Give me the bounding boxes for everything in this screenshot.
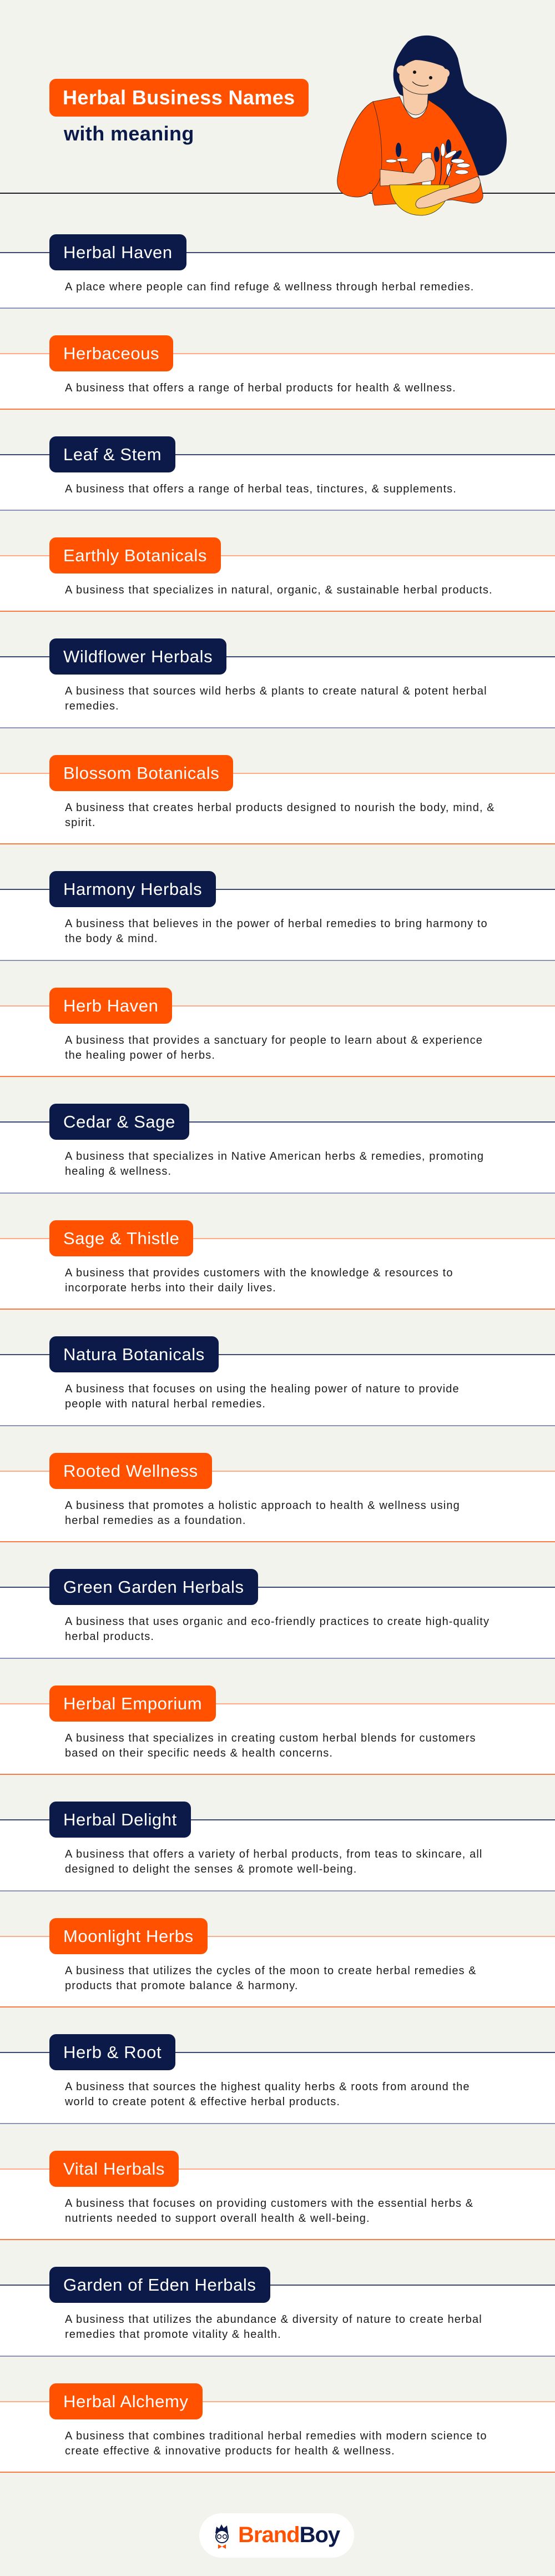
entry: Sage & Thistle: incorporate herbs into their daily lives. [65,1281,276,1294]
entry: Herb Haven: A business that provides a sanctuary for people to learn about & experience [65,1034,483,1046]
entry: Earthly Botanicals [0,555,555,612]
entry: Garden of Eden Herbals: remedies that promote vitality & health. [65,2328,281,2341]
entry: Herbal Haven: A place where people can find refuge & wellness through herbal remedies. [65,281,474,293]
icon: boy [215,2524,229,2549]
entry: Herbal Alchemy: create effective & innovative products for health & wellness. [65,2445,395,2457]
entry: Cedar & Sage: healing & wellness. [65,1165,171,1178]
entry: Vital Herbals [0,2169,555,2240]
entry: Wildflower Herbals: Wildflower Herbals [63,647,213,666]
entry: Blossom Botanicals: A business that creates herbal products designed to nourish the body, mind, & [65,802,495,814]
entry: Leaf & Stem: A business that offers a range of herbal teas, tinctures, & supplements. [65,483,457,495]
subtitle: with meaning [64,122,194,145]
entry: Green Garden Herbals: A business that uses organic and eco-friendly practices to create high-quality [65,1616,490,1628]
entry: Natura Botanicals: Natura Botanicals [63,1345,205,1364]
logo text: BrandBoy [238,2523,340,2547]
entry: Harmony Herbals: the body & mind. [65,933,158,945]
entry: Blossom Botanicals: Blossom Botanicals [63,763,219,783]
entry: Wildflower Herbals [0,656,555,728]
footer logo: BrandBoy [199,2513,354,2558]
entry: Sage & Thistle: A business that provides customers with the knowledge & resources to [65,1267,453,1279]
entry: Vital Herbals: A business that focuses on providing customers with the essential herbs & [65,2197,473,2210]
entry: Harmony Herbals: Harmony Herbals [63,879,202,899]
entry: Herb & Root [0,2052,555,2124]
entry: Cedar & Sage: Cedar & Sage [63,1112,175,1131]
entry: Sage & Thistle [0,1238,555,1310]
entry: Herbaceous [0,353,555,410]
entry: Earthly Botanicals: A business that specializes in natural, organic, & sustainable herbal products. [65,584,493,596]
entry: Blossom Botanicals [0,773,555,844]
entry: Rooted Wellness: herbal remedies as a foundation. [65,1515,246,1527]
entry: Moonlight Herbs: products that promote balance & harmony. [65,1980,299,1992]
entry: Natura Botanicals: A business that focuses on using the healing power of nature to provide [65,1383,460,1395]
entry: Harmony Herbals [0,889,555,960]
entry: Herbal Emporium: based on their specific needs & health concerns. [65,1747,333,1759]
entry: Herbal Delight: A business that offers a variety of herbal products, from teas to skincare, all [65,1848,482,1860]
entry: Cedar & Sage [0,1121,555,1194]
entry: Herb & Root: A business that sources the highest quality herbs & roots from around the [65,2081,470,2093]
entry: Cedar & Sage: A business that specializes in Native American herbs & remedies, promoting [65,1150,484,1163]
entry: Leaf & Stem: Leaf & Stem [63,445,162,464]
entry: Moonlight Herbs: A business that utilizes the cycles of the moon to create herbal remedies & [65,1964,477,1976]
entry: Green Garden Herbals: Green Garden Herbals [63,1577,244,1597]
entry: Herb & Root: Herb & Root [63,2042,162,2062]
entry: Rooted Wellness: A business that promotes a holistic approach to health & wellness using [65,1499,460,1511]
entry: Vital Herbals: Vital Herbals [63,2159,165,2178]
entry: Natura Botanicals [0,1354,555,1426]
entry: Herbal Haven [0,252,555,309]
entry: Sage & Thistle: Sage & Thistle [63,1228,179,1248]
entry: Garden of Eden Herbals [0,2285,555,2356]
entry: Rooted Wellness [0,1470,555,1542]
entry: Herbaceous: Herbaceous [63,344,159,363]
entry: Garden of Eden Herbals: A business that utilizes the abundance & diversity of nature to create herbal [65,2313,482,2326]
illustration: woman with mortar [337,36,507,215]
entry: Herbal Delight: Herbal Delight [63,1810,177,1829]
entry: Herbal Emporium [0,1703,555,1775]
entry: Herbal Emporium: A business that specializes in creating custom herbal blends for customers [65,1732,476,1744]
entry: Herbal Alchemy [0,2401,555,2473]
title [49,79,309,117]
entry: Green Garden Herbals: herbal products. [65,1631,154,1643]
entry: Wildflower Herbals: A business that sources wild herbs & plants to create natural & potent herbal [65,685,487,697]
entry: Moonlight Herbs [0,1935,555,2008]
entry: Herb Haven [0,1005,555,1077]
entry: Herb Haven: Herb Haven [63,996,158,1015]
entry: Herbal Delight [0,1819,555,1891]
entry: Harmony Herbals: A business that believes in the power of herbal remedies to bring harmony to [65,918,488,930]
entry: Natura Botanicals: people with natural herbal remedies. [65,1398,266,1410]
entry: Blossom Botanicals: spirit. [65,816,95,828]
entry: Herb & Root: world to create potent & effective herbal products. [65,2096,340,2108]
entry: Herbaceous: A business that offers a range of herbal products for health & wellness. [65,382,456,394]
entry: Herb Haven: the healing power of herbs. [65,1049,215,1061]
title: Herbal Business Names [63,86,295,109]
entry: Herbal Emporium: Herbal Emporium [63,1693,202,1713]
entry: Green Garden Herbals [0,1587,555,1659]
entry: Leaf & Stem [0,454,555,511]
entry: Moonlight Herbs: Moonlight Herbs [63,1926,194,1945]
entry: Herbal Alchemy: A business that combines traditional herbal remedies with modern science to [65,2429,487,2442]
entry: Wildflower Herbals: remedies. [65,700,119,712]
entry: Herbal Alchemy: Herbal Alchemy [63,2392,189,2411]
entry: Rooted Wellness: Rooted Wellness [63,1461,198,1480]
entry: Vital Herbals: nutrients needed to support overall health & well-being. [65,2212,370,2224]
entry: Herbal Haven: Herbal Haven [63,243,173,262]
entry: Earthly Botanicals: Earthly Botanicals [63,546,207,565]
entry: Garden of Eden Herbals: Garden of Eden Herbals [63,2275,256,2295]
entry: Herbal Delight: designed to delight the senses & promote well-being. [65,1863,357,1875]
header [0,0,555,194]
